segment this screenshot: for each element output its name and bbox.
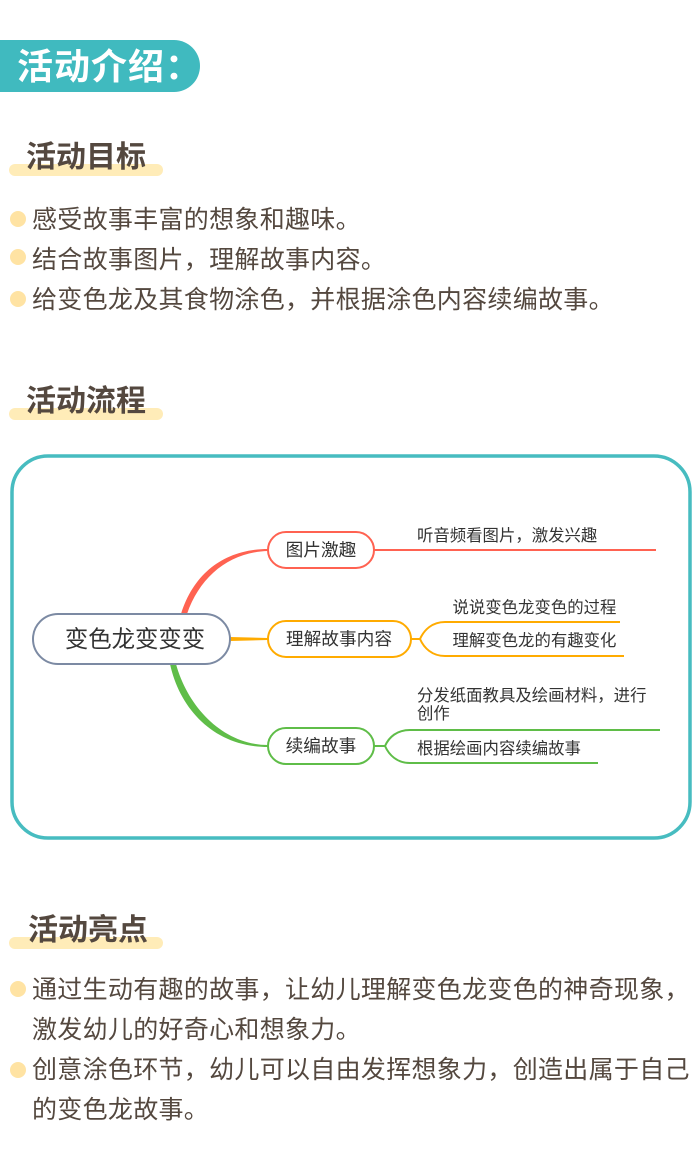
bullet 1 (10, 211, 26, 227)
heading: 活动目标: 活动目标 (26, 141, 146, 174)
branch: 图片激趣: 图片激趣 (286, 540, 357, 560)
highlight 1: 通过生动有趣的故事，让幼儿理解变色龙变色的神奇现象， (32, 976, 690, 1004)
highlight 2: 创意涂色环节，幼儿可以自由发挥想象力，创造出属于自己 (32, 1056, 690, 1084)
heading: 活动流程: 活动流程 (26, 385, 146, 418)
branch: 图片激趣: 听音频看图片，激发兴趣 (417, 527, 597, 545)
branch: 理解故事内容 (230, 599, 624, 657)
text block: highlights (10, 976, 690, 1124)
highlight 1 continued: 激发幼儿的好奇心和想象力。 (32, 1016, 361, 1044)
central topic (33, 614, 230, 664)
branch: 图片激趣 (181, 527, 656, 614)
branch: 理解故事内容: 理解故事内容 (286, 629, 392, 649)
goal 1: 感受故事丰富的想象和趣味。 (32, 206, 361, 234)
panel border (12, 456, 690, 838)
text block: goals (10, 206, 614, 314)
goal 2: 结合故事图片，理解故事内容。 (32, 246, 386, 274)
bullet 1 (10, 981, 26, 997)
branch: 理解故事内容: 说说变色龙变色的过程 (452, 599, 616, 617)
branch: 续编故事: 根据绘画内容续编故事 (417, 740, 581, 758)
branch: 续编故事: 创作 (417, 705, 450, 723)
branch: 续编故事: 续编故事 (286, 736, 356, 756)
branch: 续编故事 (170, 664, 660, 764)
bullet 2 (10, 1062, 26, 1078)
branch: 理解故事内容: 理解变色龙的有趣变化 (452, 632, 616, 650)
branch: 续编故事: 分发纸面教具及绘画材料，进行 (417, 687, 646, 705)
bullet 3 (10, 291, 26, 307)
bullet 2 (10, 249, 26, 265)
heading: 活动亮点: 活动亮点 (28, 914, 148, 947)
goal 3: 给变色龙及其食物涂色，并根据涂色内容续编故事。 (32, 286, 614, 314)
banner: 活动介绍 (0, 40, 200, 92)
highlight 2 continued: 的变色龙故事。 (32, 1096, 209, 1124)
banner title: 活动介绍： (17, 46, 202, 87)
central topic: 变色龙变变变 (65, 626, 205, 652)
